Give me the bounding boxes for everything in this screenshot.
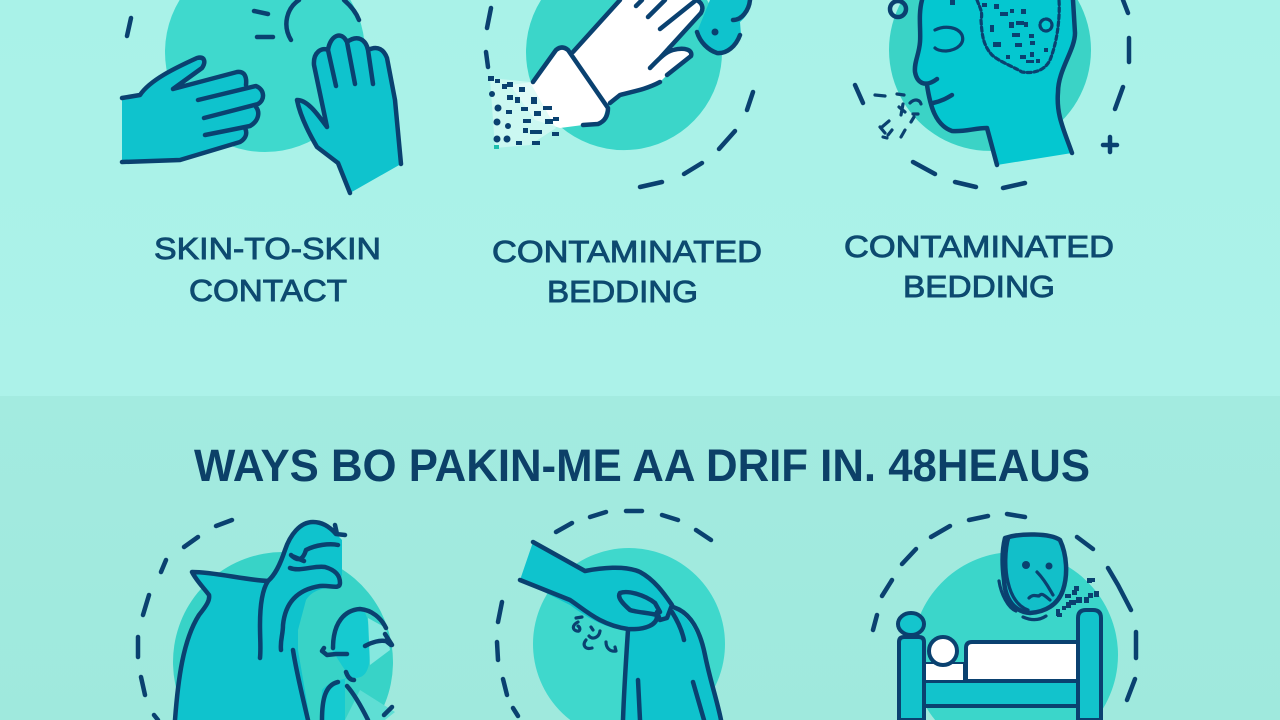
label: contaminated bedding: BEDDING [903,269,1055,304]
background circle [533,548,725,720]
icon: small person [320,608,395,720]
label: skin-to-skin contact [154,231,381,308]
icon: dashed ring [855,0,1129,188]
icon: teal blob [697,0,750,53]
panel: bed and face [873,514,1136,720]
icon: dashed ring [486,8,753,187]
icon: scattered flakes [573,617,616,651]
background circle [889,0,1091,151]
label: skin-to-skin contact: CONTACT [189,273,347,308]
icon: dashed ring [138,520,232,720]
panel: contaminated bedding, head [844,0,1129,304]
icon: breath particles [875,94,921,138]
icon: plus sign [1103,137,1117,152]
icon: dashed ring [873,514,1136,700]
icon: scattered particles [488,76,559,149]
title: WAYS BO PAKIN-ME AA DRIF IN. 48HEAUS [194,440,1090,491]
icon: right hand [297,36,401,193]
label: contaminated bedding: BEDDING [547,274,698,309]
icon: head profile [915,0,1075,165]
background circle [526,0,722,150]
icon: worried face [999,534,1066,620]
label: skin-to-skin contact: SKIN-TO-SKIN [154,231,381,266]
icon: hand [520,542,672,630]
label: contaminated bedding: CONTAMINATED [844,229,1114,264]
panel: skin-to-skin contact [122,0,401,308]
panel: pillow and person [138,520,395,720]
icon: dashed ring fragments [127,0,359,40]
panel: contaminated bedding, hand [486,0,762,309]
icon: dashed ring [497,511,711,716]
background circle [912,552,1118,720]
icon: bed [898,610,1101,720]
background circle [173,552,393,720]
icon: shoulder and arm [623,606,721,720]
label: contaminated bedding [492,234,762,309]
icon: speckled brain [950,0,1059,72]
label: contaminated bedding: CONTAMINATED [492,234,762,269]
panel: hand on shoulder [497,511,725,720]
icon: small ring [890,1,906,17]
label: contaminated bedding [844,229,1114,304]
icon: sneeze particles [1056,578,1099,617]
icon: pillow body [175,522,345,720]
background circle [165,0,365,152]
icon: left hand [122,58,263,162]
icon: white glove hand [490,0,702,148]
